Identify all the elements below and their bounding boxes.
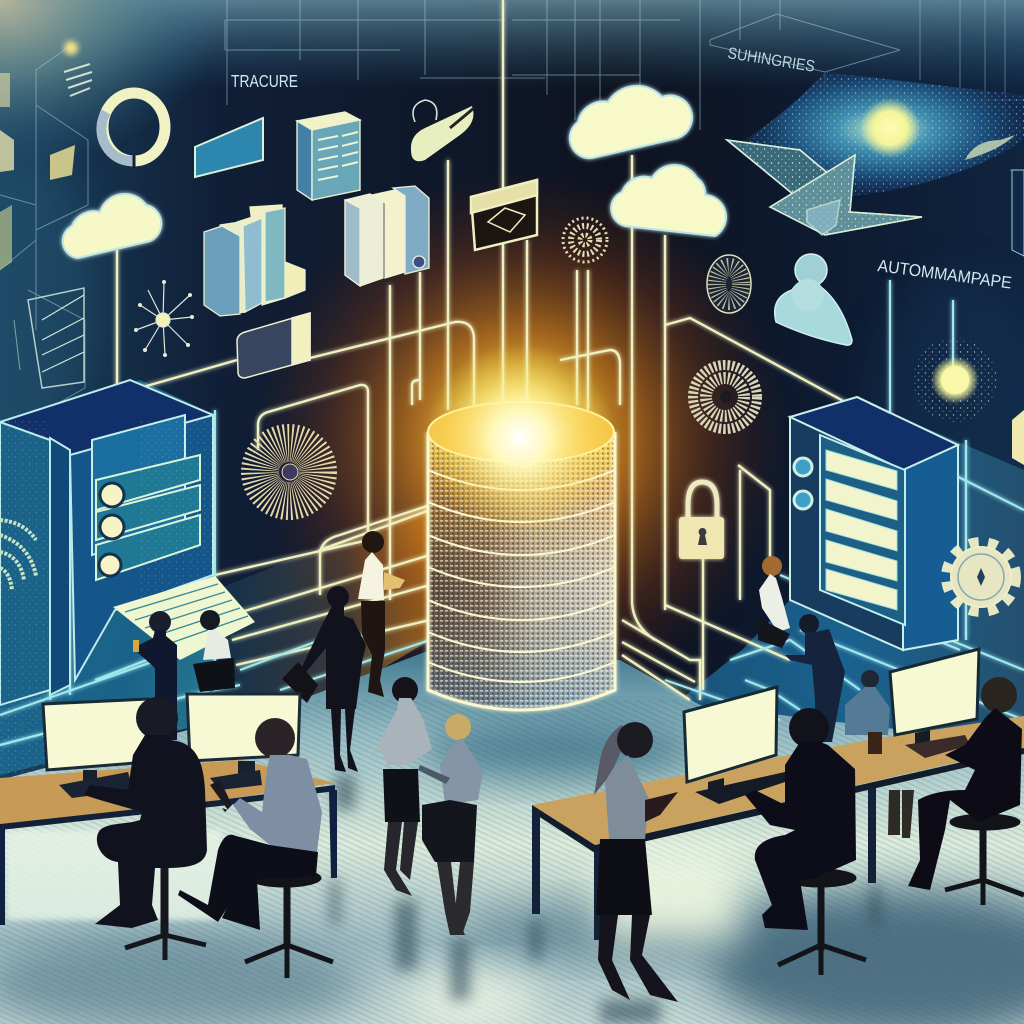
left panel blue backdrop [0,380,300,775]
monitor [43,699,148,798]
floor reflections [330,775,880,1024]
server indicator lights [794,458,812,509]
icon: upper cloud [570,86,692,158]
monitor [187,694,300,790]
left desk [0,760,337,925]
icon: isometric sketch blocks left [0,41,92,388]
person: man with tablet, back left [133,611,177,740]
floor [0,650,1024,1024]
person: standing woman with ponytail [594,722,678,1002]
icon: gear [948,544,1014,610]
person: seated man right [745,708,866,975]
person: seated man far right [908,677,1024,905]
chair [245,869,333,978]
label: AUTOMMAMPAPE: AUTOMMAMPAPE [876,256,1013,293]
left monitors [43,694,300,798]
icon: striped disc [707,255,751,313]
icon: left cloud [63,194,161,258]
person: man in white shirt [358,531,405,697]
icon: radial fan [260,443,318,501]
server indicator lights [99,483,124,576]
desk pen cup [868,732,882,754]
speckle overlay on panels [0,420,215,775]
person: standing woman left [372,677,432,896]
icon: binder group left [204,205,305,316]
central orange glow [250,170,790,710]
chair [945,814,1024,905]
icon: right server [790,397,958,650]
server bars [826,450,897,610]
icon: binder group right [345,186,429,286]
server rack rows [96,455,200,580]
right monitors [684,649,979,804]
icon: mesh card [237,313,310,378]
desk legs [532,788,876,940]
icon: blue cloud person [775,254,852,345]
icon: wifi arcs [0,520,36,590]
monitor [890,649,979,758]
chair [778,869,866,975]
desk legs [0,790,337,925]
icon: hub starburst [134,280,194,357]
central database cylinder [428,402,615,710]
icon: donut chart [101,93,165,168]
cylinder top [428,402,614,462]
monitor [684,687,785,804]
right desk [532,716,1024,940]
icon: paper plane [727,140,922,235]
chair [125,866,206,960]
pull-out keyboard panel [113,576,255,660]
person: man in dark suit [785,614,845,742]
briefcase [282,662,318,703]
icon: display panel [195,118,263,177]
person: seated man in grey shirt [178,718,333,978]
cylinder bands [428,470,615,682]
icon: dotted gear [693,365,757,429]
icon: right edge box [1012,170,1024,465]
background grid lines [0,0,1024,420]
icon: dandelion [563,218,607,262]
person: seated woman, back left [193,610,235,692]
circuit lines over blue panels [0,280,1024,745]
icon: left server [0,380,255,705]
back wall group: blurred woman and man, right [758,556,914,838]
icon: top centre card [471,180,537,250]
icon: glowing orb [913,338,997,422]
lower central wall strip [215,505,430,700]
nebula sphere [745,72,1024,200]
circuit lines [117,0,860,700]
person: woman with briefcase [282,586,366,772]
icon: padlock [679,482,724,559]
icon: satellite dish tool [411,100,474,161]
label: SUHINGRIES: SUHINGRIES [726,45,816,76]
central light burst [425,343,615,533]
person: woman in white blouse [758,556,790,648]
person: standing woman right with folder [418,714,483,935]
icon: middle cloud [611,165,726,236]
icon: top server stack [297,112,360,200]
person: blurred woman [845,670,914,838]
right panel blue backdrop [680,400,1024,745]
cylinder outline [428,432,615,710]
label: TRACURE: TRACURE [231,71,298,91]
person: seated man in dark suit [84,697,207,960]
